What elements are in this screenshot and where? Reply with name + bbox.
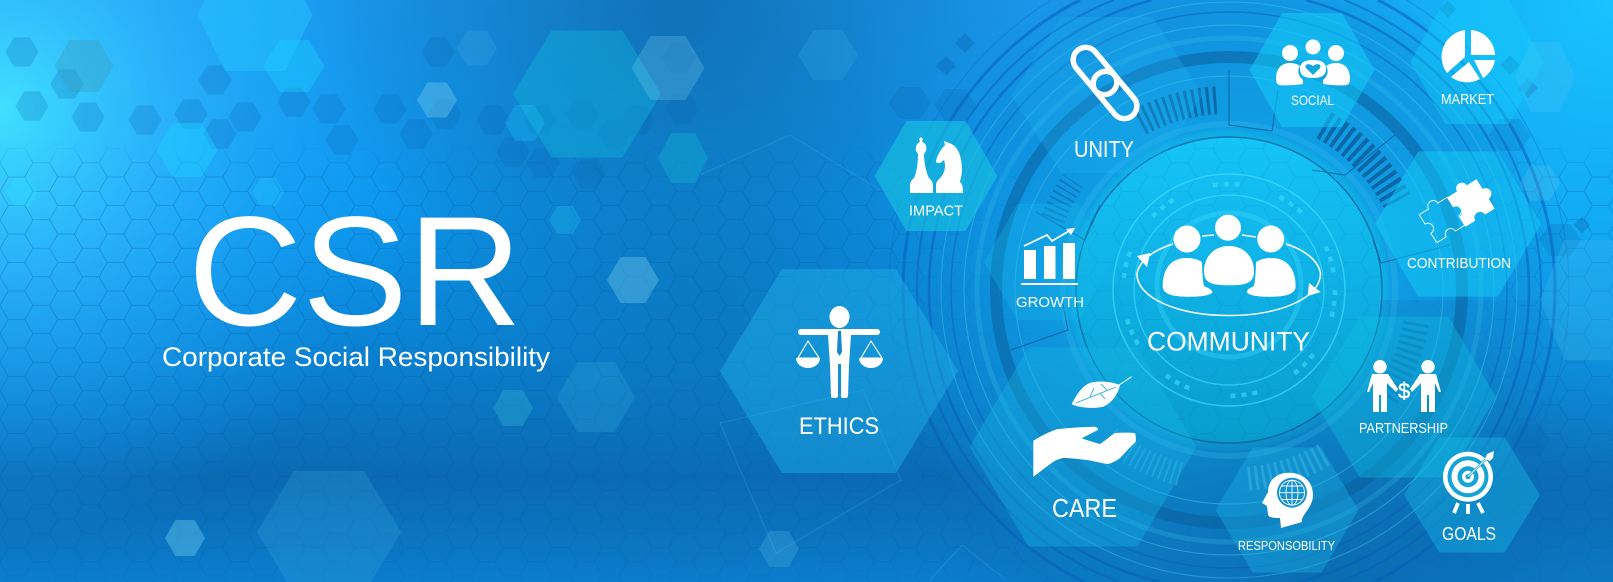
label: contribution: CONTRIBUTION	[1407, 255, 1511, 272]
panel: goals hexagon	[1404, 438, 1540, 552]
icon: caring hand	[1033, 427, 1136, 477]
icon: growth chart	[1021, 228, 1078, 285]
label: impact: IMPACT	[909, 204, 963, 220]
icon: leaf	[1072, 377, 1132, 408]
panel: far right pale hexagons	[1515, 42, 1613, 360]
label: ethics: ETHICS	[799, 413, 879, 440]
label: goals: GOALS	[1442, 524, 1496, 544]
panel: partnership hexagon	[1312, 316, 1496, 478]
icon: partnership men with dollar	[1367, 360, 1441, 412]
label: growth: GROWTH	[1016, 294, 1084, 311]
icon: partnership men with dollar: $	[1398, 378, 1410, 404]
panel: unity hexagon	[1012, 17, 1202, 173]
panel: growth hexagon	[984, 204, 1112, 320]
label: community: COMMUNITY	[1147, 326, 1310, 356]
icon: target with arrow	[1443, 451, 1494, 514]
icon: chess pieces	[910, 137, 963, 193]
circular HUD background	[889, 0, 1613, 582]
panel: care hexagon	[970, 348, 1196, 546]
honeycomb pattern	[0, 146, 1613, 574]
title: CSR: CSR	[188, 185, 522, 359]
scattered small dark hexagons	[5, 38, 698, 188]
icon: head with globe	[1262, 473, 1313, 528]
panel: impact hexagon	[874, 121, 998, 231]
label: responsibility: RESPONSOBILITY	[1238, 538, 1335, 553]
label: partnership: PARTNERSHIP	[1359, 421, 1448, 437]
panel: contribution hexagon	[1375, 152, 1541, 296]
icon: chain link	[1068, 42, 1142, 124]
panel: ethics hexagon	[720, 269, 958, 473]
label: market: MARKET	[1441, 92, 1494, 108]
icon: puzzle pieces	[1416, 171, 1500, 243]
subtitle: Corporate Social Responsibility	[162, 342, 551, 372]
icon: social people with heart	[1276, 40, 1350, 85]
icon: community group	[1137, 215, 1321, 316]
panel: market hexagon	[1410, 0, 1544, 124]
icon: market pie chart	[1442, 30, 1495, 82]
label: care: CARE	[1052, 493, 1117, 523]
panel: social hexagon	[1250, 13, 1374, 127]
label: unity: UNITY	[1074, 136, 1134, 162]
panel: responsibility hexagon	[1216, 448, 1358, 572]
label: social: SOCIAL	[1291, 92, 1334, 108]
faint background line polygons	[700, 135, 1006, 580]
icon: ethics figure with scales	[796, 306, 883, 398]
scattered pale hexagons	[6, 0, 858, 582]
